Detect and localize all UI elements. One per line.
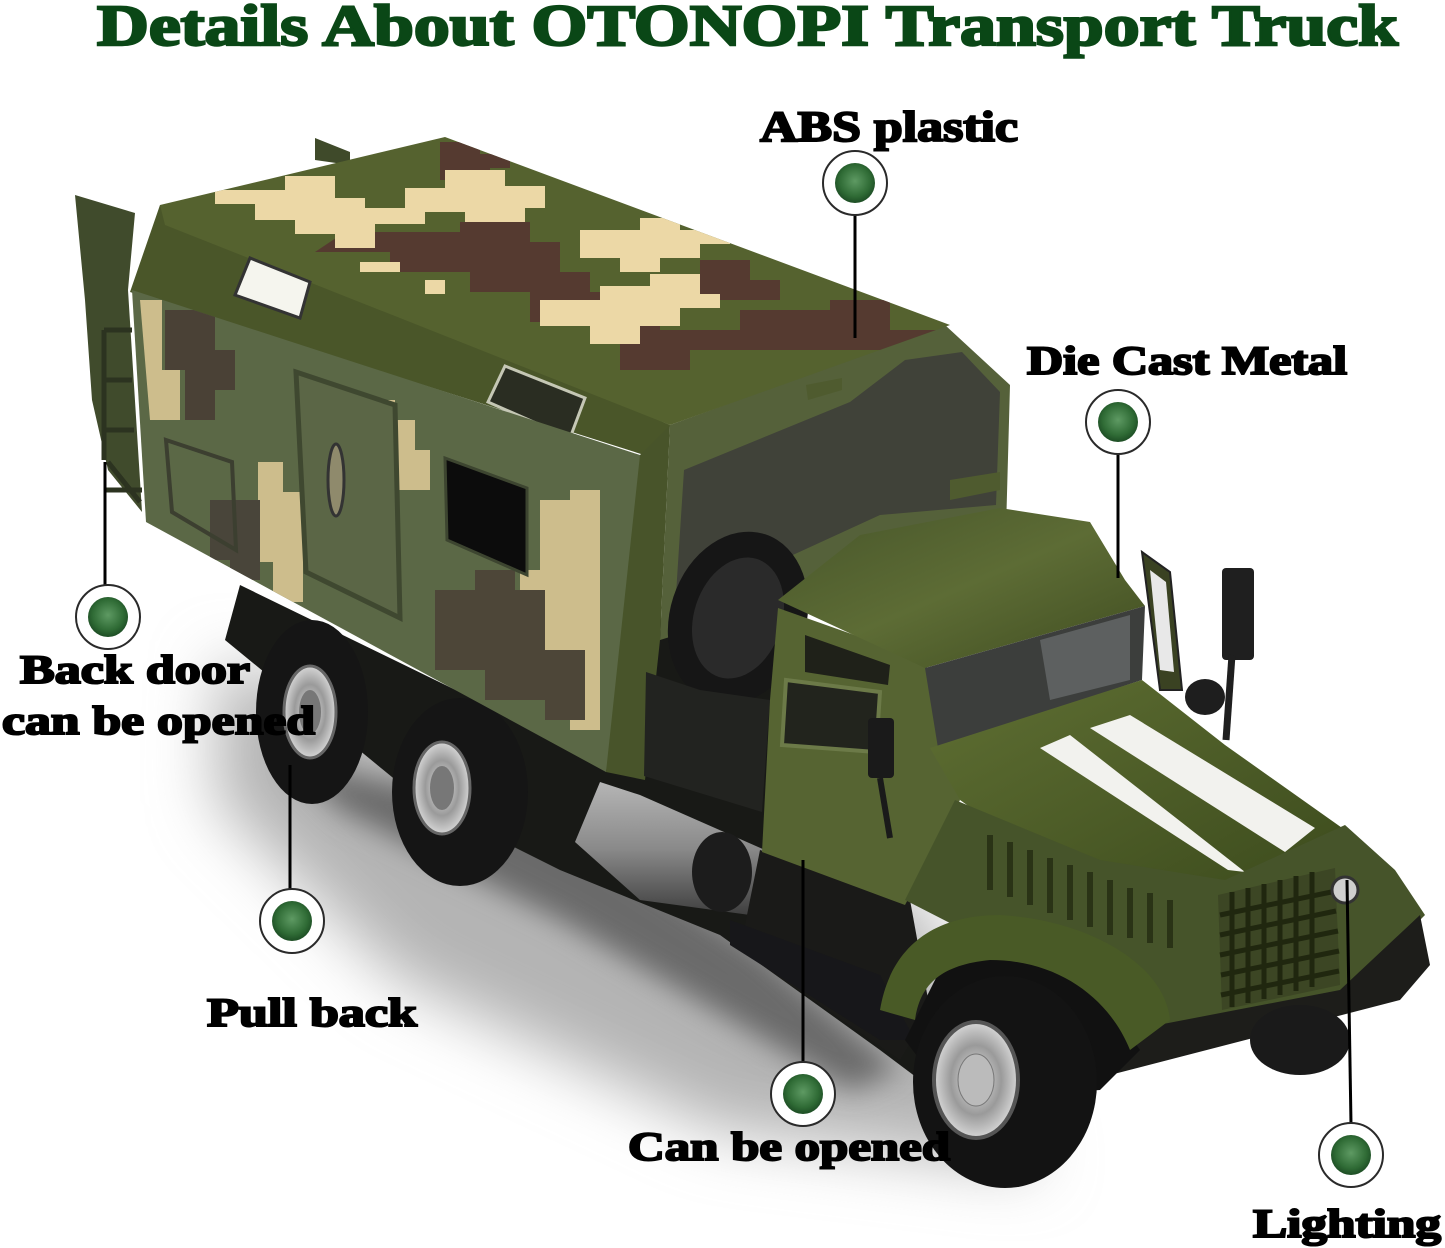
rear wheels [256, 620, 528, 886]
silver fuel tank [575, 782, 765, 915]
chassis and dark underside [225, 585, 1100, 1140]
side panel with camo [132, 290, 660, 772]
callout: Can be opened [628, 860, 950, 1169]
label [2, 647, 315, 743]
label: Die Cast Metal [1027, 338, 1347, 383]
label: Pull back [207, 990, 418, 1035]
headlight [1332, 877, 1358, 903]
back door and ladder [75, 138, 350, 512]
dark area under the door [740, 850, 930, 1060]
callout: Lighting [1253, 880, 1441, 1246]
marker [1086, 390, 1150, 454]
under chassis [730, 920, 915, 1040]
marker [771, 1062, 835, 1126]
label: Back door [20, 647, 250, 692]
cab body, roof and windshield [778, 508, 1182, 748]
ground shadow [215, 660, 1040, 1170]
marker [823, 151, 887, 215]
marker [76, 585, 140, 649]
marker [260, 889, 324, 953]
front face of box [660, 325, 1010, 640]
callout: Die Cast Metal [1027, 338, 1347, 578]
label: can be opened [2, 698, 315, 743]
rear of front axle tire [1250, 1005, 1350, 1075]
front fender [880, 915, 1170, 1050]
leader line [288, 765, 292, 890]
roof and upper side band [130, 137, 950, 460]
callout: Back door [2, 462, 315, 743]
box corner [606, 425, 670, 780]
hood with white stripes [930, 680, 1345, 900]
front bumper [1080, 915, 1430, 1075]
leader line [1116, 453, 1120, 578]
spare tire [646, 513, 830, 723]
front body [905, 800, 1425, 1060]
leader line [854, 214, 856, 338]
marker [1319, 1123, 1383, 1187]
callout: ABS plastic [760, 104, 1018, 338]
label: Can be opened [628, 1124, 950, 1169]
cab door [762, 608, 960, 905]
label: Lighting [1253, 1201, 1441, 1246]
label: ABS plastic [760, 104, 1018, 151]
truck illustration [75, 137, 1430, 1188]
callout: Pull back [207, 765, 418, 1035]
side mirror [1185, 568, 1254, 740]
side louvres [990, 835, 1170, 948]
front wheel [913, 976, 1097, 1188]
leader line [1347, 880, 1351, 1124]
wheel well [905, 950, 1140, 1100]
black tool box [644, 672, 770, 812]
leader line [104, 462, 106, 586]
grille [1218, 868, 1340, 1010]
leader line [802, 860, 804, 1063]
